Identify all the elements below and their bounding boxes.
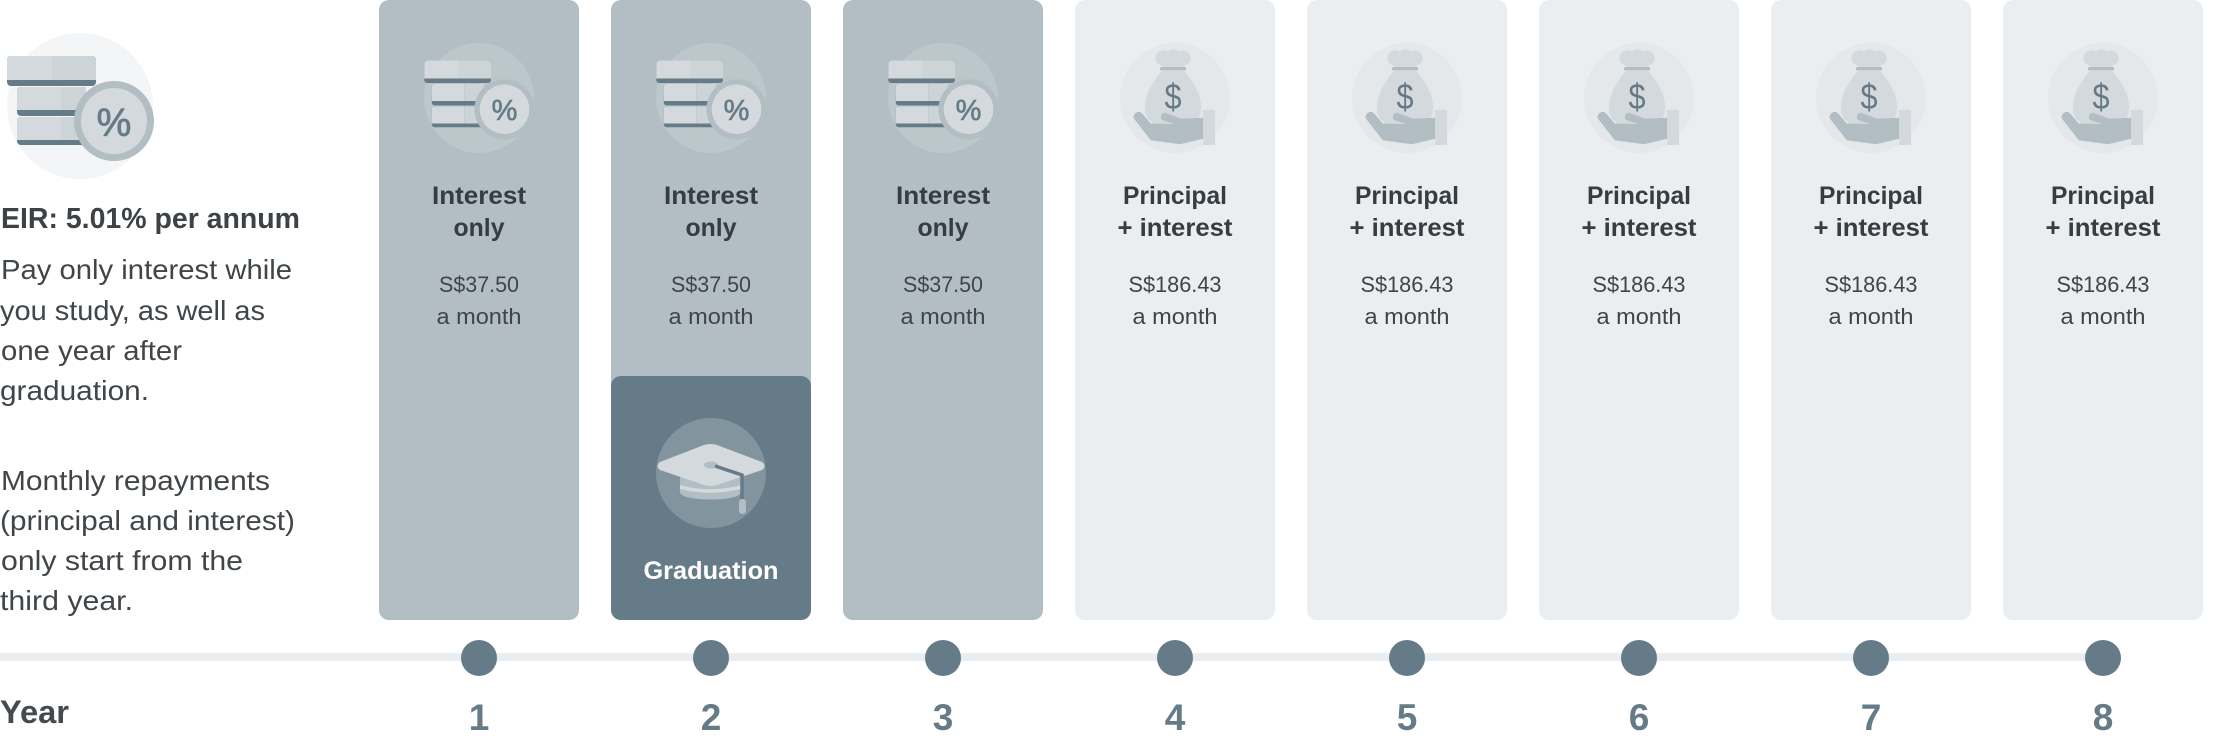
amount: S$186.43 — [1360, 272, 1454, 297]
icon: coin stack with percent: % — [956, 95, 981, 127]
year numbers: 3 — [933, 697, 953, 738]
amount: a month — [668, 304, 754, 329]
panel: graduation — [611, 376, 811, 620]
text block: monthly repayments: (principal and interest) — [0, 505, 295, 536]
year numbers: 8 — [2093, 697, 2113, 738]
label: repayment type: + interest — [1350, 214, 1465, 242]
icon: coin stack with percent — [888, 43, 998, 153]
amount: S$186.43 — [2056, 272, 2150, 297]
amount: a month — [900, 304, 986, 329]
amount: a month — [1828, 304, 1914, 329]
label: repayment type: Interest — [896, 182, 991, 210]
text block: interest explanation: one year after — [1, 335, 182, 366]
label: repayment type: Principal — [1587, 182, 1691, 210]
icon: money bag in hand — [2048, 43, 2158, 153]
icon: money bag in hand: $ — [1860, 76, 1878, 117]
amount: S$37.50 — [439, 272, 519, 297]
icon: coin stack with percent — [424, 43, 534, 153]
text block: monthly repayments: only start from the — [1, 545, 243, 576]
label: repayment type: Principal — [1355, 182, 1459, 210]
label: repayment type: + interest — [2046, 214, 2161, 242]
icon: coin stack with percent: % — [492, 95, 517, 127]
icon: large coin stack with percent — [7, 33, 154, 179]
year numbers: 5 — [1397, 697, 1417, 738]
label: graduation: Graduation — [644, 557, 778, 585]
panel: year 2 — [611, 0, 811, 620]
panel: year 4 — [1075, 0, 1275, 620]
year numbers: 4 — [1165, 697, 1186, 738]
amount: a month — [2060, 304, 2146, 329]
icon: money bag in hand — [1120, 43, 1230, 153]
icon: money bag in hand: $ — [1164, 76, 1182, 117]
amount: S$186.43 — [1824, 272, 1918, 297]
icon: coin stack with percent: % — [724, 95, 749, 127]
label: repayment type: only — [918, 214, 969, 242]
panel: year 6 — [1539, 0, 1739, 620]
amount: a month — [1364, 304, 1450, 329]
icon: money bag in hand — [1584, 43, 1694, 153]
year numbers: 2 — [701, 697, 721, 738]
label: repayment type: only — [454, 214, 505, 242]
icon: large coin stack with percent: % — [97, 102, 131, 145]
heading: EIR: EIR: 5.01% per annum — [1, 203, 300, 235]
amount: S$186.43 — [1592, 272, 1686, 297]
label: repayment type: + interest — [1118, 214, 1233, 242]
label: repayment type: only — [686, 214, 737, 242]
label: repayment type: + interest — [1814, 214, 1929, 242]
label: repayment type: + interest — [1582, 214, 1697, 242]
amount: S$37.50 — [671, 272, 751, 297]
label: repayment type: Principal — [2051, 182, 2155, 210]
year numbers — [469, 697, 2113, 738]
amount: S$186.43 — [1128, 272, 1222, 297]
text block: interest explanation: graduation. — [0, 375, 149, 406]
timeline axis — [0, 640, 2121, 676]
icon: money bag in hand: $ — [2092, 76, 2110, 117]
icon: money bag in hand — [1352, 43, 1462, 153]
icon: coin stack with percent — [656, 43, 766, 153]
amount: a month — [1132, 304, 1218, 329]
label: repayment type: Interest — [664, 182, 759, 210]
label: repayment type: Interest — [432, 182, 527, 210]
panel: year 8 — [2003, 0, 2203, 620]
amount: a month — [436, 304, 522, 329]
text block: monthly repayments: third year. — [0, 585, 133, 616]
year numbers: 1 — [469, 697, 489, 738]
label: repayment type: Principal — [1123, 182, 1227, 210]
text block: interest explanation: Pay only interest while — [1, 254, 292, 285]
year numbers: 6 — [1629, 697, 1649, 738]
icon: money bag in hand: $ — [1628, 76, 1646, 117]
panel: year 5 — [1307, 0, 1507, 620]
amount: S$37.50 — [903, 272, 983, 297]
icon: graduation cap — [656, 418, 766, 528]
icon: money bag in hand — [1816, 43, 1926, 153]
axis label: Year: Year — [0, 694, 69, 730]
panel: year 1 — [379, 0, 579, 620]
panel: year 3 — [843, 0, 1043, 620]
text block: interest explanation: you study, as well as — [0, 295, 265, 326]
amount: a month — [1596, 304, 1682, 329]
text block: monthly repayments: Monthly repayments — [1, 465, 270, 496]
year numbers: 7 — [1861, 697, 1881, 738]
icon: money bag in hand: $ — [1396, 76, 1414, 117]
panel: year 7 — [1771, 0, 1971, 620]
label: repayment type: Principal — [1819, 182, 1923, 210]
